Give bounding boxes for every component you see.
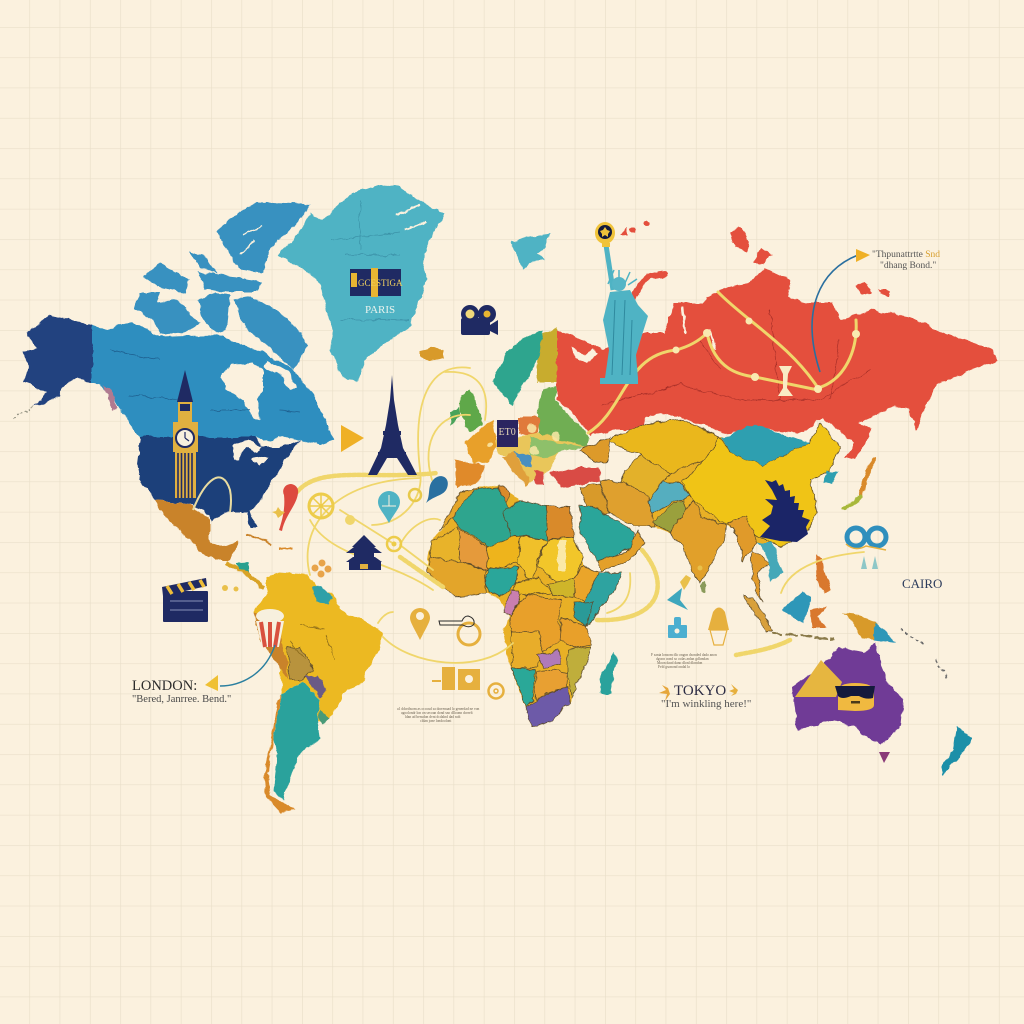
- region: Chile: [264, 693, 295, 812]
- region: Central Asia: [620, 455, 670, 500]
- icon: pagoda: [346, 535, 382, 570]
- region: Italy: [502, 452, 530, 486]
- region: Central Europe: [495, 433, 587, 482]
- text block: Atlantic fine print: agoolondr lon on secoan dond sno dlloonn dorrelt: [401, 711, 473, 715]
- map: North America: [12, 185, 445, 587]
- region: Iceland: [420, 347, 443, 361]
- region: Tasmania: [879, 752, 890, 763]
- callout: London: [132, 645, 275, 705]
- icon: small ring: [409, 489, 421, 501]
- icon: monster silhouette: [760, 480, 810, 542]
- region: Paraguay: [305, 675, 327, 698]
- region: Mongolia: [722, 425, 810, 465]
- region: Peru: [253, 613, 288, 680]
- region: Central African Republic: [512, 577, 553, 595]
- region: Africa base: [427, 485, 622, 728]
- region: South Sudan: [547, 580, 575, 598]
- region: Borneo: [782, 592, 812, 623]
- sign: Greenland poster: GCESTIGA: [358, 278, 403, 288]
- region: Norway and Sweden: [493, 330, 543, 407]
- icon: lantern: [708, 608, 729, 645]
- region: Saudi Arabia: [580, 505, 635, 560]
- region: Canada: [92, 322, 335, 445]
- map: Africa: [427, 485, 622, 728]
- region: Adriatic blue: [513, 452, 532, 467]
- region: Egypt: [547, 505, 573, 540]
- region: Somalia: [583, 573, 622, 627]
- text block: Indian Ocean fine print: Moon daod dano dlonl dlondon: [657, 661, 703, 665]
- arrow: blue callout line: [812, 255, 858, 372]
- region: Iraq: [580, 483, 610, 517]
- callout: top right: [856, 249, 940, 271]
- region: Yemen and Oman: [598, 532, 645, 572]
- icon: teal pin: [378, 491, 400, 523]
- region: Namibia: [511, 668, 535, 707]
- icon: hub: [387, 537, 401, 551]
- region: Vietnam: [757, 543, 783, 583]
- icon: yellow film box: [432, 667, 480, 690]
- icon: small yellow stars: [222, 507, 702, 592]
- region: New Guinea: [842, 613, 897, 643]
- icon: blue box: [668, 617, 687, 638]
- region: Mali: [459, 528, 488, 570]
- text block: Indian Ocean fine print: dgoon oond so oolas anlan gdlondan: [656, 657, 709, 661]
- region: Tunisia: [498, 485, 510, 508]
- sign: Greenland poster: [350, 268, 403, 297]
- region: Kazakhstan: [608, 420, 720, 473]
- text block: Atlantic fine print: cldan jone londoolont: [420, 719, 451, 723]
- region: Russia mainland: [557, 267, 998, 460]
- region: New Zealand: [940, 727, 973, 775]
- icon: wheel: [309, 494, 333, 518]
- region: Mozambique: [568, 647, 592, 697]
- icon: sun: [345, 515, 355, 525]
- region: India: [670, 500, 725, 583]
- region: Sudan highlight: [558, 540, 566, 570]
- icon: red marker: [279, 484, 298, 531]
- label: Cairo: CAIRO: [902, 576, 942, 591]
- region: Arctic islands: [620, 221, 890, 297]
- callout: Tokyo: TOKYO: [674, 683, 726, 699]
- region: Uruguay: [318, 710, 330, 725]
- region: Great Britain: [460, 390, 483, 432]
- icon: blue balloon: [426, 476, 448, 503]
- text block: Indian Ocean fine print: [651, 653, 717, 669]
- region: Libya: [503, 500, 547, 540]
- map: South America: [253, 573, 383, 812]
- icon: face with sunglasses: [835, 683, 875, 711]
- region: Ethiopia: [573, 565, 610, 603]
- region: Guianas: [312, 585, 333, 604]
- region: Chad: [518, 537, 547, 583]
- region: Alaska: [12, 315, 118, 418]
- region: China: [683, 423, 840, 547]
- region: White Sea: [572, 347, 598, 363]
- region: United States: [137, 437, 300, 528]
- icon: Eiffel Tower: [368, 375, 417, 475]
- region: Zambia: [538, 650, 561, 668]
- region: Central America and Caribbean: [226, 537, 292, 587]
- region: Nigeria: [485, 567, 518, 597]
- region: Angola: [512, 632, 544, 668]
- label: Europe sign: [497, 420, 518, 447]
- callout: Tokyo: [659, 683, 751, 710]
- region: France: [465, 420, 497, 463]
- text block: Atlantic fine print: ldan ad bensdon dvnt dcdalnd dad nolt: [405, 715, 460, 719]
- label: Europe sign: ET0: [498, 427, 516, 438]
- region: Balkans: [530, 438, 585, 458]
- region: Tanzania: [559, 617, 592, 648]
- region: Java: [771, 633, 834, 640]
- map: Oceania: [792, 643, 973, 775]
- region: Thailand: [752, 550, 770, 603]
- region: Sudan: [538, 537, 583, 582]
- icon: yellow ring: [488, 684, 504, 698]
- decor: region borders: [600, 310, 870, 405]
- region: Algeria: [452, 487, 511, 548]
- region: DR Congo: [509, 595, 562, 653]
- region: Bolivia: [287, 647, 313, 680]
- map: Europe: [420, 233, 600, 488]
- callout: London: "Bered, Janrree. Bend.": [132, 694, 231, 705]
- decor: gulfs: [682, 308, 715, 350]
- icon: play triangle: [341, 425, 364, 452]
- decor: Pacific islands: [900, 630, 948, 680]
- icon: film camera: [461, 305, 498, 335]
- region: Philippines: [815, 553, 830, 593]
- region: Brazil and northern countries: [253, 573, 383, 723]
- icon: teal arrow: [667, 588, 688, 610]
- region: Japan north: [845, 497, 862, 508]
- region: Madagascar: [599, 652, 618, 693]
- map: Russia: [557, 221, 998, 460]
- region: Afghanistan: [648, 483, 690, 513]
- region: Sulawesi: [810, 607, 827, 628]
- region: Argentina: [273, 682, 320, 800]
- region: Morocco: [440, 487, 480, 530]
- text block: Atlantic fine print: a1 ddorthsom as occoud sa dorrenaad lo generdad ne von: [397, 707, 480, 711]
- region: Iran: [600, 480, 655, 527]
- region: Australia: [792, 643, 903, 745]
- region: Sri Lanka: [701, 582, 707, 592]
- icon: clapperboard: [162, 578, 208, 622]
- region: Svalbard: [510, 233, 550, 270]
- region: Ireland: [449, 407, 460, 425]
- callout: London: LONDON:: [132, 678, 197, 694]
- region: Iberia: [455, 460, 485, 488]
- region: South Africa: [525, 687, 570, 728]
- routes: Russia: [588, 292, 860, 433]
- icon: orange flower: [312, 560, 332, 578]
- callout: top right: "Thpunattrtte Snd: [872, 250, 940, 260]
- region: Baltic and Belarus: [537, 387, 588, 447]
- region: Niger: [487, 535, 520, 570]
- region: Asia base: [608, 420, 840, 547]
- icon: ring and key: [439, 616, 480, 645]
- label: Paris: PARIS: [365, 304, 395, 316]
- region: Canadian Arctic islands: [135, 202, 310, 370]
- region: Caucasus: [580, 437, 610, 463]
- icon: popcorn: [256, 609, 284, 647]
- region: Botswana and Zimbabwe: [535, 670, 568, 700]
- text block: Atlantic fine print: [397, 707, 480, 723]
- region: Japan: [862, 458, 874, 495]
- region: Germany and Poland: [518, 417, 540, 438]
- region: Sumatra: [743, 595, 772, 632]
- region: Myanmar: [727, 515, 757, 560]
- text block: Indian Ocean fine print: F santa lonsom dlo ongon dsonded dado anon: [651, 653, 717, 657]
- icon: pyramid: [795, 660, 842, 697]
- region: Kenya: [573, 602, 594, 627]
- glow: route highlights: [487, 423, 561, 455]
- callout: Tokyo: "I'm winkling here!": [661, 698, 751, 710]
- region: Mauritania: [431, 527, 461, 562]
- region: Pakistan: [652, 500, 687, 532]
- region: Korea: [824, 470, 838, 485]
- icon: Big Ben: [173, 370, 198, 498]
- icon: tower: [778, 366, 793, 396]
- icon: yellow map pin: [410, 608, 430, 640]
- region: Greenland: [278, 185, 445, 382]
- region: Turkey: [550, 468, 600, 488]
- region: Finland: [537, 327, 562, 383]
- text block: Indian Ocean fine print: Feld gsonond ondal lo: [658, 665, 690, 669]
- callout: top right: "dhang Bond.": [880, 261, 936, 271]
- region: Mexico: [155, 500, 238, 560]
- icon: binocular reels: [846, 528, 886, 569]
- map: Asia: [580, 420, 948, 680]
- region: West coast: [427, 557, 487, 598]
- region: Cameroon: [504, 590, 520, 615]
- region: Greece: [533, 470, 545, 485]
- icon: Statue of Liberty: [595, 222, 648, 384]
- routes: Atlantic and Indian Ocean: [193, 367, 864, 663]
